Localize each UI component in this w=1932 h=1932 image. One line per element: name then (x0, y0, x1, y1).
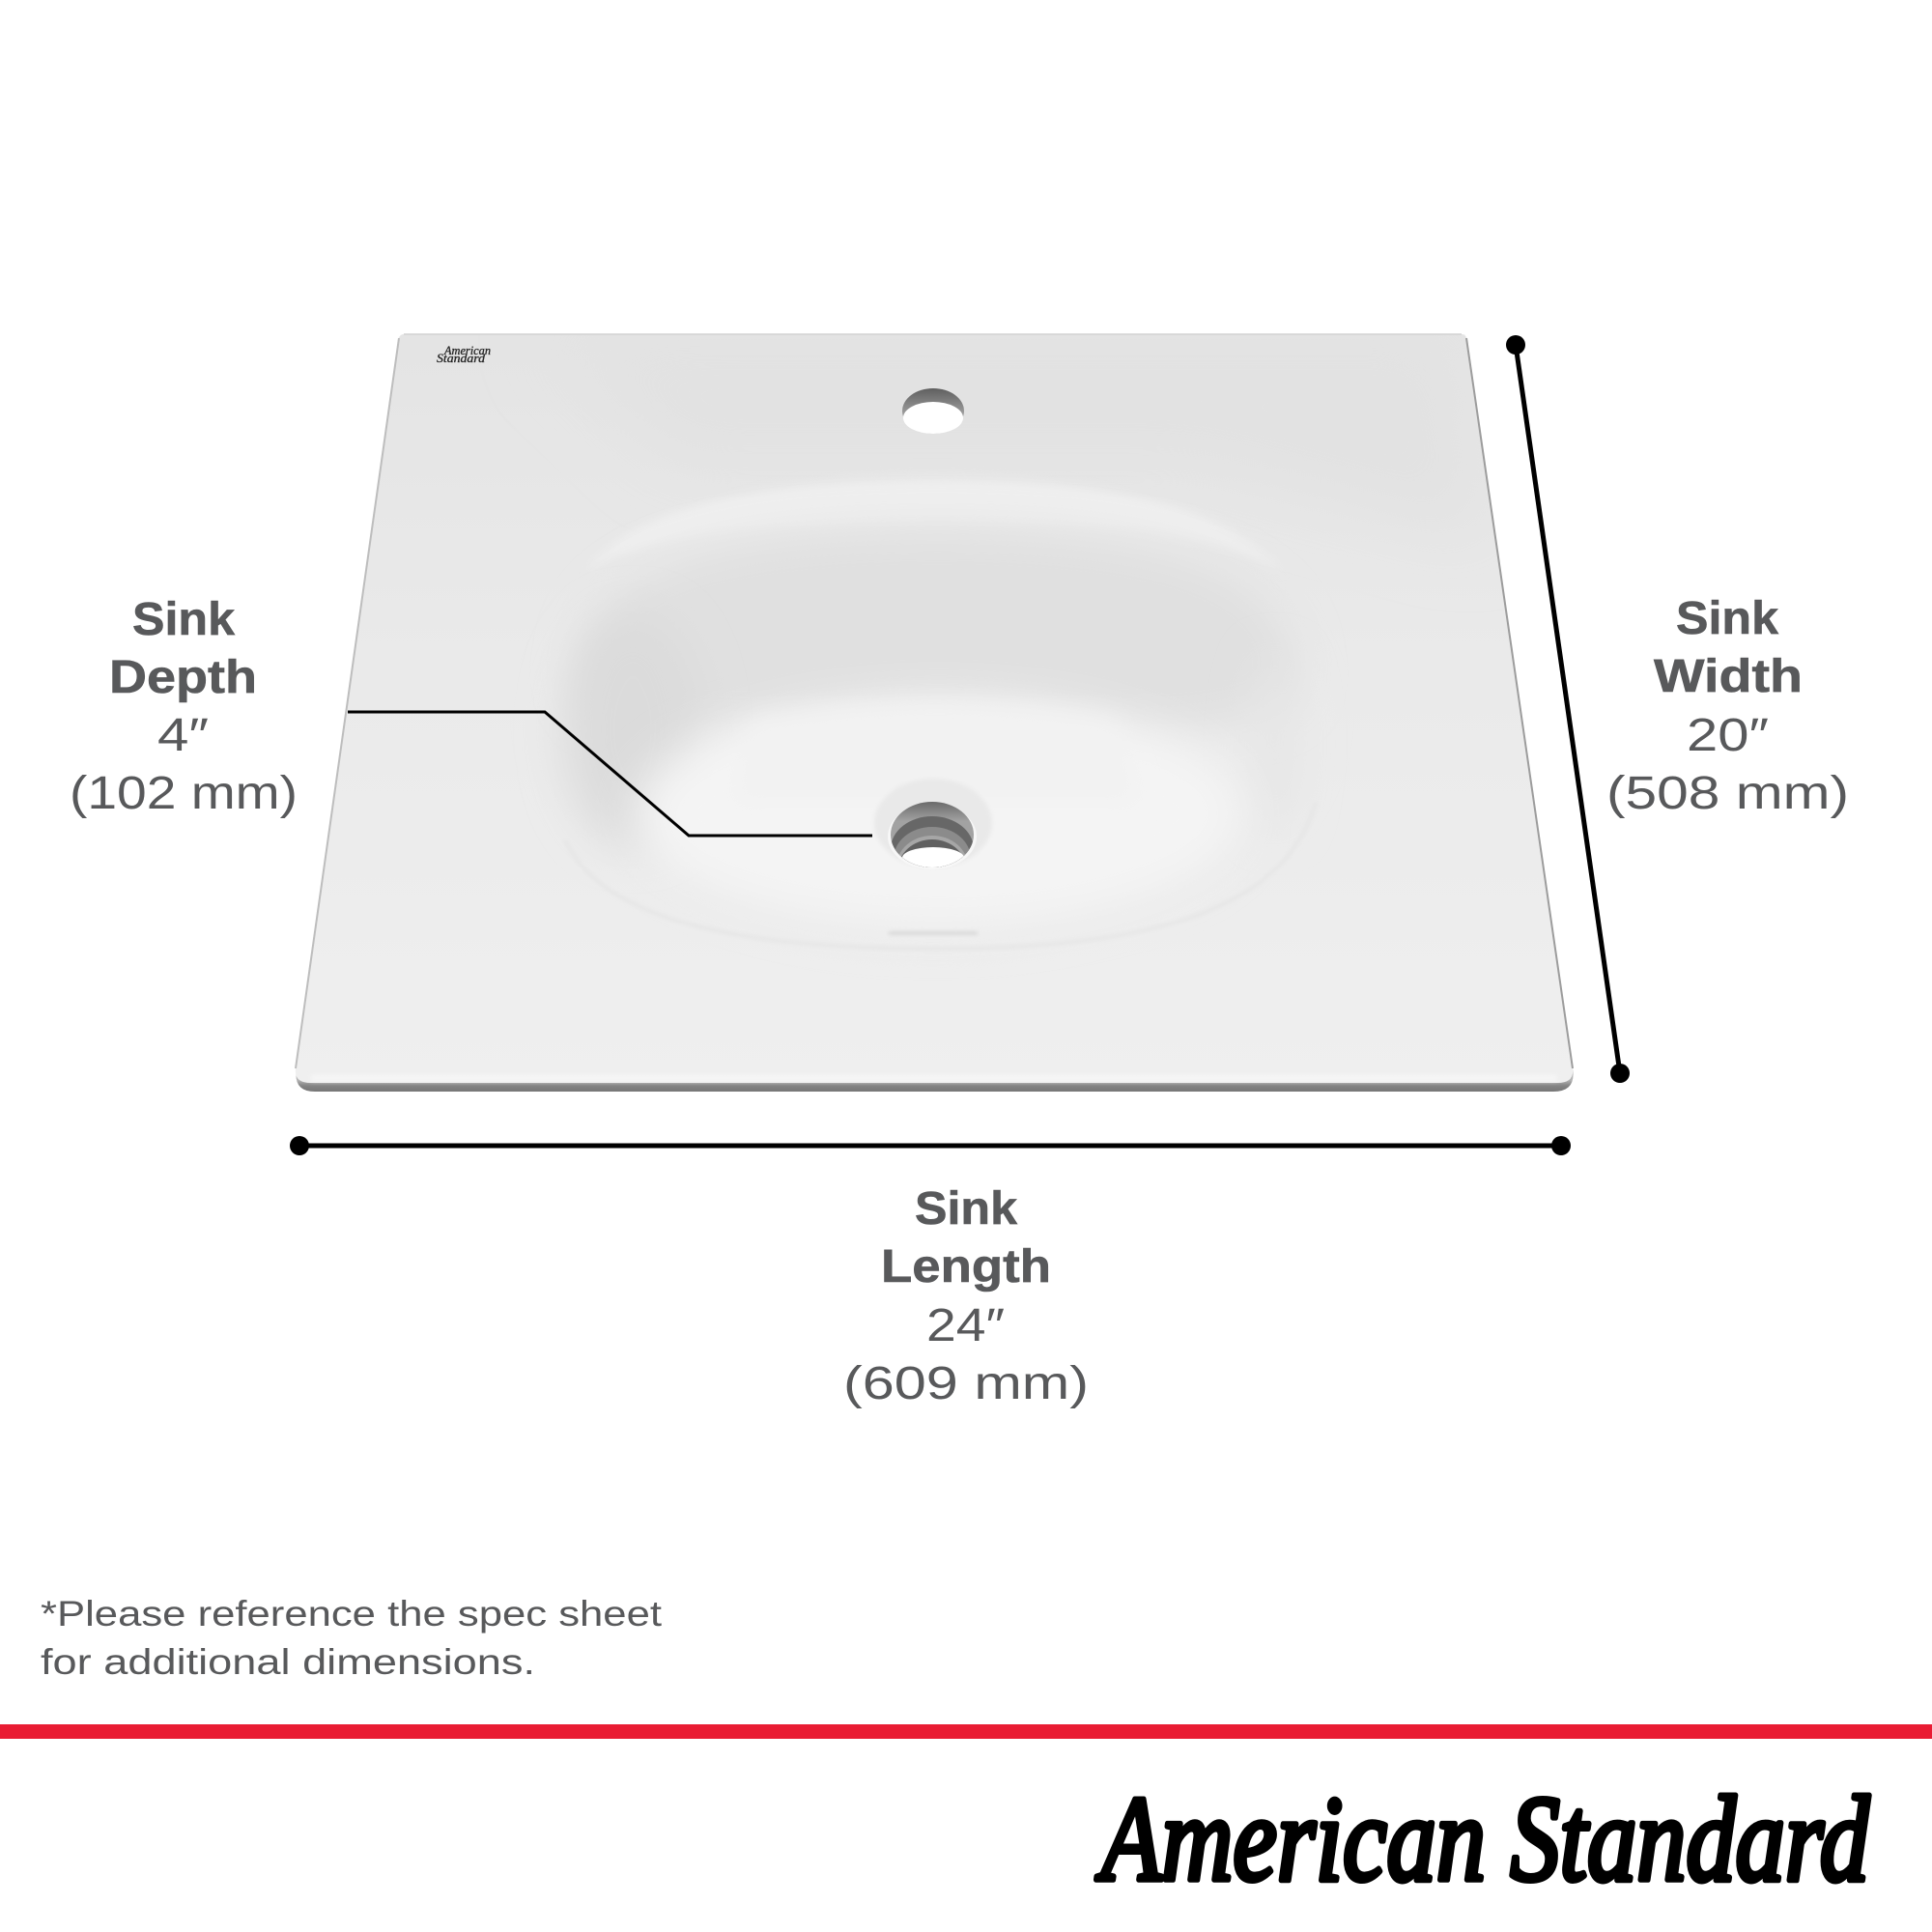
icon: drain (875, 781, 991, 867)
panel: sink illustration (296, 334, 1574, 1092)
basin shading (564, 488, 1269, 935)
label: sink depth: 4″ (157, 710, 209, 761)
length dimension line (290, 1136, 1571, 1155)
icon: small sink logo: American (443, 343, 491, 357)
label: sink length: Length (881, 1241, 1051, 1293)
sink right edge (1466, 338, 1573, 1068)
label: sink width: Width (1654, 651, 1803, 702)
depth leader line (348, 712, 872, 836)
label: sink length: Sink (915, 1183, 1017, 1235)
footnote: for additional dimensions. (41, 1642, 535, 1682)
label: sink width: 20″ (1687, 710, 1769, 761)
sink front highlight (311, 1075, 1557, 1081)
sink front lip (296, 1068, 1574, 1092)
basin front glint (889, 932, 978, 934)
label: sink depth (70, 594, 298, 819)
label: sink length (843, 1183, 1089, 1409)
label: sink length: 24″ (926, 1300, 1005, 1351)
sink top edge (404, 333, 1462, 335)
icon: small sink logo (437, 343, 491, 365)
icon: small sink logo: Standard (437, 351, 486, 365)
label: sink depth: Sink (132, 594, 235, 645)
label: sink depth: Depth (109, 652, 257, 703)
icon: faucet hole (902, 388, 964, 434)
sink edge lines (296, 338, 399, 1068)
footnote: *Please reference the spec sheet (41, 1594, 663, 1634)
label: sink width: (508 mm) (1606, 768, 1849, 819)
sink top surface (296, 334, 1573, 1083)
red divider bar (0, 1724, 1932, 1739)
width dimension line (1506, 335, 1630, 1083)
label: sink length: (609 mm) (843, 1358, 1089, 1409)
label: sink width (1606, 593, 1849, 819)
label: sink depth: (102 mm) (70, 768, 298, 819)
label: sink width: Sink (1676, 593, 1778, 644)
footnote (41, 1594, 663, 1682)
